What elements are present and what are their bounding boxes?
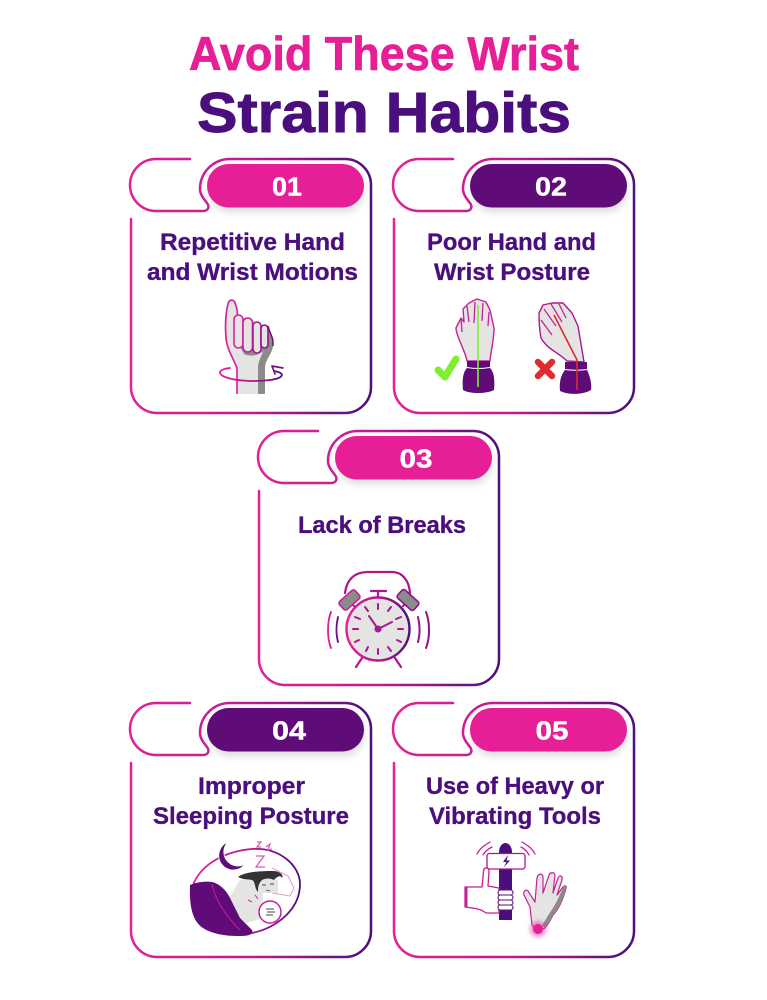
icon: person sleeping on wrist: [190, 842, 300, 936]
number badge: 01: [272, 172, 302, 202]
card outline: [393, 703, 634, 957]
number badge: [207, 164, 364, 212]
card outline: [130, 703, 371, 957]
moon: [219, 842, 245, 870]
card outline: [130, 159, 371, 413]
blanket: [190, 882, 252, 936]
number badge: [335, 436, 492, 484]
icon: rotating wrist hand: [220, 300, 283, 394]
heading: Use of Heavy or: [426, 773, 604, 800]
card outline: [393, 159, 634, 413]
heading: Wrist Posture: [434, 259, 590, 286]
heading: [153, 773, 349, 830]
heading: Sleeping Posture: [153, 803, 349, 830]
heading: Poor Hand and: [427, 229, 596, 256]
number badge: 03: [400, 444, 432, 474]
injured hand: [524, 873, 566, 930]
title: Strain Habits: [197, 81, 571, 145]
icon: correct wrist posture: [456, 299, 494, 393]
panel: 01 repetitive motions: [130, 159, 371, 413]
heading: Lack of Breaks: [298, 512, 466, 539]
panel: 05 heavy or vibrating tools: [393, 703, 634, 957]
number badge: 04: [272, 716, 307, 746]
panel: 04 sleeping posture: [130, 703, 371, 957]
card outline: [258, 431, 499, 685]
number badge: [470, 708, 627, 756]
number badge: 02: [535, 172, 567, 202]
icon: incorrect wrist posture: [539, 303, 591, 394]
heading: Repetitive Hand: [160, 229, 345, 256]
number badge: 05: [536, 716, 568, 746]
icon: cross mark: [538, 362, 552, 376]
magnified wrist: [259, 901, 281, 923]
icon: vibrating tool in hand: [465, 842, 566, 937]
number badge: [207, 708, 364, 756]
heading: [426, 773, 604, 830]
heading: [427, 229, 596, 286]
icon: check mark: [438, 359, 456, 377]
heading: and Wrist Motions: [147, 259, 358, 286]
heading: Vibrating Tools: [429, 803, 601, 830]
panel: 03 lack of breaks: [258, 431, 499, 685]
heading: [147, 229, 358, 286]
title: [189, 27, 579, 145]
heading: Improper: [198, 773, 305, 800]
panel: 02 poor posture: [393, 159, 634, 413]
icon: alarm clock: [328, 572, 429, 667]
title: Avoid These Wrist: [189, 27, 579, 80]
number badge: [470, 164, 627, 212]
